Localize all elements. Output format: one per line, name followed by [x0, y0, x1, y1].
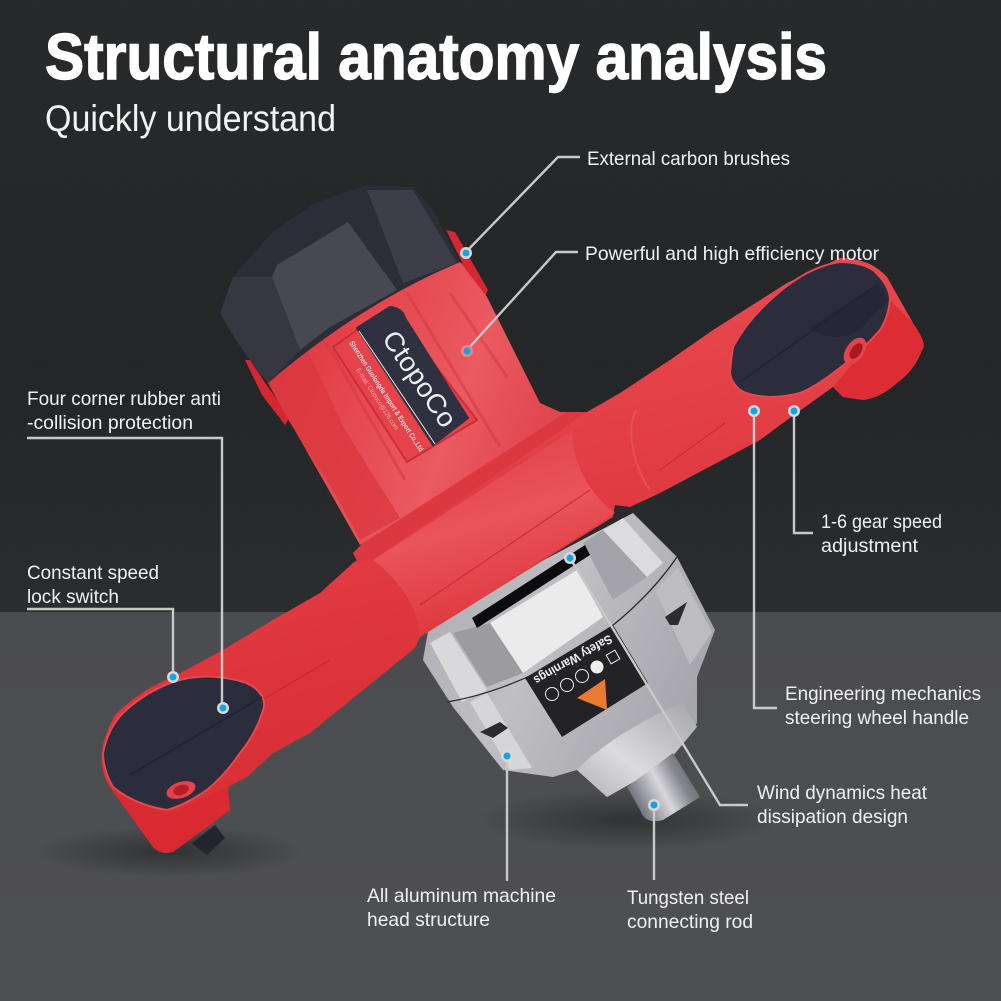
collar band	[373, 430, 615, 637]
safety warnings plate	[525, 625, 648, 737]
callout: connecting rod: connecting rod	[627, 911, 753, 933]
callout: heat dissipation	[564, 552, 928, 828]
callout: rubber protection	[27, 388, 229, 714]
callout: external carbon brushes	[460, 148, 790, 259]
callout: heat dissipation: Wind dynamics heat	[757, 782, 928, 804]
housing ribs	[322, 293, 507, 480]
callout: steering wheel handle: steering wheel handle	[785, 707, 969, 729]
brand name: CtopoCo	[376, 325, 463, 433]
callout: gear speed: adjustment	[821, 535, 919, 557]
callout: lock switch	[27, 562, 179, 683]
brush cover right	[446, 230, 488, 297]
company name: Shenzhen Guolongda Import & Export Co.,Ltd	[347, 339, 426, 453]
collar flange	[353, 412, 587, 563]
callout: gear speed	[788, 405, 942, 557]
tungsten steel connecting rod	[627, 753, 700, 821]
screws	[480, 722, 508, 738]
callout: motor	[461, 243, 879, 357]
heat dissipation vent	[472, 545, 590, 628]
aluminum machine head	[423, 513, 715, 797]
callout: motor: Powerful and high efficiency motor	[585, 243, 879, 265]
callout: gear speed: 1-6 gear speed	[821, 511, 942, 533]
rubber end cap	[220, 185, 460, 383]
cross handle	[102, 258, 924, 855]
company e-mail: E-mail: Ctopoco@126.com	[354, 367, 399, 431]
callout: external carbon brushes: External carbon brushes	[587, 148, 790, 170]
callout: steering wheel handle	[748, 405, 981, 729]
callout: heat dissipation: dissipation design	[757, 806, 908, 828]
seam line	[447, 557, 677, 702]
floor shadows under the tool	[35, 790, 778, 878]
background: dark upper wall	[0, 0, 1001, 612]
callout: connecting rod	[627, 799, 753, 933]
left grip screw hole	[164, 778, 198, 802]
right grip screw hole	[839, 334, 871, 368]
arm creases	[631, 410, 650, 490]
title: Structural anatomy analysis	[45, 20, 827, 93]
callout: rubber protection: Four corner rubber anti	[27, 388, 221, 410]
neck	[577, 703, 697, 797]
right rubber grip	[730, 262, 890, 397]
callout: steering wheel handle: Engineering mechanics	[785, 683, 981, 705]
callout: rubber protection: -collision protection	[27, 412, 193, 434]
motor housing	[220, 185, 587, 563]
warning triangle	[577, 679, 607, 710]
callout: aluminum head	[367, 750, 556, 931]
illustration: mixer drill	[102, 185, 924, 855]
callout: connecting rod: Tungsten steel	[627, 887, 749, 909]
subtitle: Quickly understand	[45, 98, 336, 139]
brand badge	[333, 307, 477, 462]
plate text: Safety Warnings	[531, 632, 615, 687]
callout: aluminum head: All aluminum machine	[367, 885, 556, 907]
left rubber grip	[103, 677, 264, 810]
callout: lock switch: Constant speed	[27, 562, 159, 584]
plate symbols	[546, 650, 620, 700]
callout: lock switch: lock switch	[27, 586, 119, 608]
left stub	[192, 825, 225, 855]
brush cover left	[245, 360, 290, 425]
background: grey lower floor	[0, 612, 1001, 1001]
callout: aluminum head: head structure	[367, 909, 490, 931]
